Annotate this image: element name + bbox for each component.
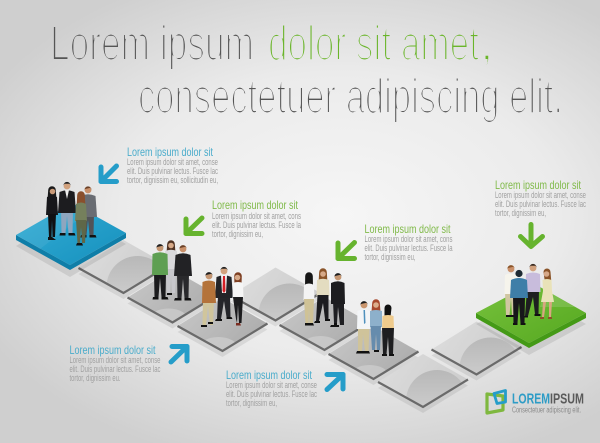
path tile 8 — [378, 354, 468, 432]
arrow: green 3 — [338, 242, 354, 258]
title: , — [480, 17, 494, 71]
arrow: green 4 — [520, 224, 542, 246]
text block 6: tortor, dignissim eu, — [226, 398, 277, 408]
logo — [487, 390, 584, 414]
text block 1: tortor, dignissim eu, sollicitudin eu, — [127, 175, 218, 185]
person: man in grey suit — [79, 186, 97, 238]
person: woman in blue — [370, 299, 382, 352]
path tile 7 — [328, 326, 418, 389]
text block 6: elit. Duis pulvinar lectus. Fusce lac — [226, 389, 317, 399]
path tile 5 — [230, 268, 320, 346]
person: man in red tie — [215, 267, 233, 321]
arrow: blue 5 — [171, 346, 187, 362]
person: woman with khaki trousers — [304, 272, 314, 326]
person: woman in cream dress — [540, 268, 554, 319]
person: woman in black — [46, 186, 58, 240]
text block 2 — [212, 198, 301, 239]
text block 5: Lorem ipsum dolor sit — [70, 343, 156, 357]
people group on blue platform — [46, 182, 97, 246]
text block 3: Lorem ipsum dolor sit amet, cons — [364, 234, 453, 244]
logo: IPSUM — [550, 390, 584, 408]
person: man in white shirt — [356, 301, 371, 354]
text block 1: elit. Duis pulvinar lectus. Fusce lac — [127, 166, 218, 176]
text block 2: Lorem ipsum dolor sit amet, cons — [212, 211, 301, 221]
logo: LOREM — [512, 390, 550, 408]
person: woman in light grey suit — [164, 240, 178, 295]
person: man in black suit — [174, 245, 192, 300]
title — [50, 17, 563, 124]
text block 3: tortor, dignissim eu, — [364, 252, 416, 262]
text block 4 — [495, 178, 586, 218]
path tile 2 — [78, 240, 168, 318]
person: woman in olive — [75, 191, 87, 246]
text block 6: Lorem ipsum dolor sit amet, conse — [226, 380, 317, 390]
text block 5: tortor, dignissim eu. — [70, 373, 120, 383]
arrow: green 2 — [186, 218, 202, 234]
people group on tile 4 — [201, 267, 244, 327]
text block 1: Lorem ipsum dolor sit — [127, 145, 213, 159]
person: man in lilac shirt — [524, 264, 540, 318]
text block 6: Lorem ipsum dolor sit — [226, 368, 312, 382]
path tile 9 — [432, 322, 522, 400]
people group on tile 3 — [152, 240, 192, 300]
path tile 6 — [280, 297, 370, 360]
blue start platform — [16, 203, 126, 277]
person: man in orange jumper — [201, 272, 216, 327]
person: man in black suit on phone — [330, 273, 345, 327]
people group on tile 7 — [356, 299, 394, 356]
arrow: blue 6 — [327, 374, 343, 390]
text block 3 — [364, 222, 453, 262]
person: man in white shirt and khaki — [504, 265, 518, 317]
person: man in blue shirt — [510, 270, 528, 325]
text block 2: Lorem ipsum dolor sit — [212, 198, 298, 212]
text block 5 — [70, 343, 161, 383]
text block 6 — [226, 368, 317, 408]
text block 5: elit. Duis pulvinar lectus. Fusce lac — [70, 364, 161, 374]
green end platform — [476, 283, 586, 355]
path tile 4 — [178, 298, 268, 361]
people group on green platform — [504, 264, 554, 325]
person: woman in white top — [232, 272, 244, 326]
icon: logo squares — [487, 390, 506, 413]
person: man in green shirt — [152, 244, 168, 300]
arrow: blue 1 — [101, 166, 116, 182]
text block 3: elit. Duis pulvinar lectus. Fusce la — [364, 243, 452, 253]
text block 4: tortor, dignissim eu, — [495, 208, 546, 218]
person: woman in yellow top — [382, 304, 394, 356]
text block 2: tortor, dignissim eu, — [212, 229, 263, 239]
path tile 3 — [128, 270, 218, 332]
text block 1 — [127, 145, 218, 185]
text block 2: elit. Duis pulvinar lectus. Fusce la — [212, 220, 301, 230]
people group on tile 6 — [304, 268, 345, 327]
title: Lorem ipsum — [50, 17, 254, 71]
text block 3: Lorem ipsum dolor sit — [364, 222, 451, 236]
title: dolor sit amet — [268, 17, 479, 71]
text block 5: Lorem ipsum dolor sit amet, conse — [70, 355, 160, 365]
person: woman in cream blazer — [314, 268, 330, 323]
text block 1: Lorem ipsum dolor sit amet, conse — [127, 157, 218, 167]
person: man with blue trousers — [58, 182, 76, 236]
